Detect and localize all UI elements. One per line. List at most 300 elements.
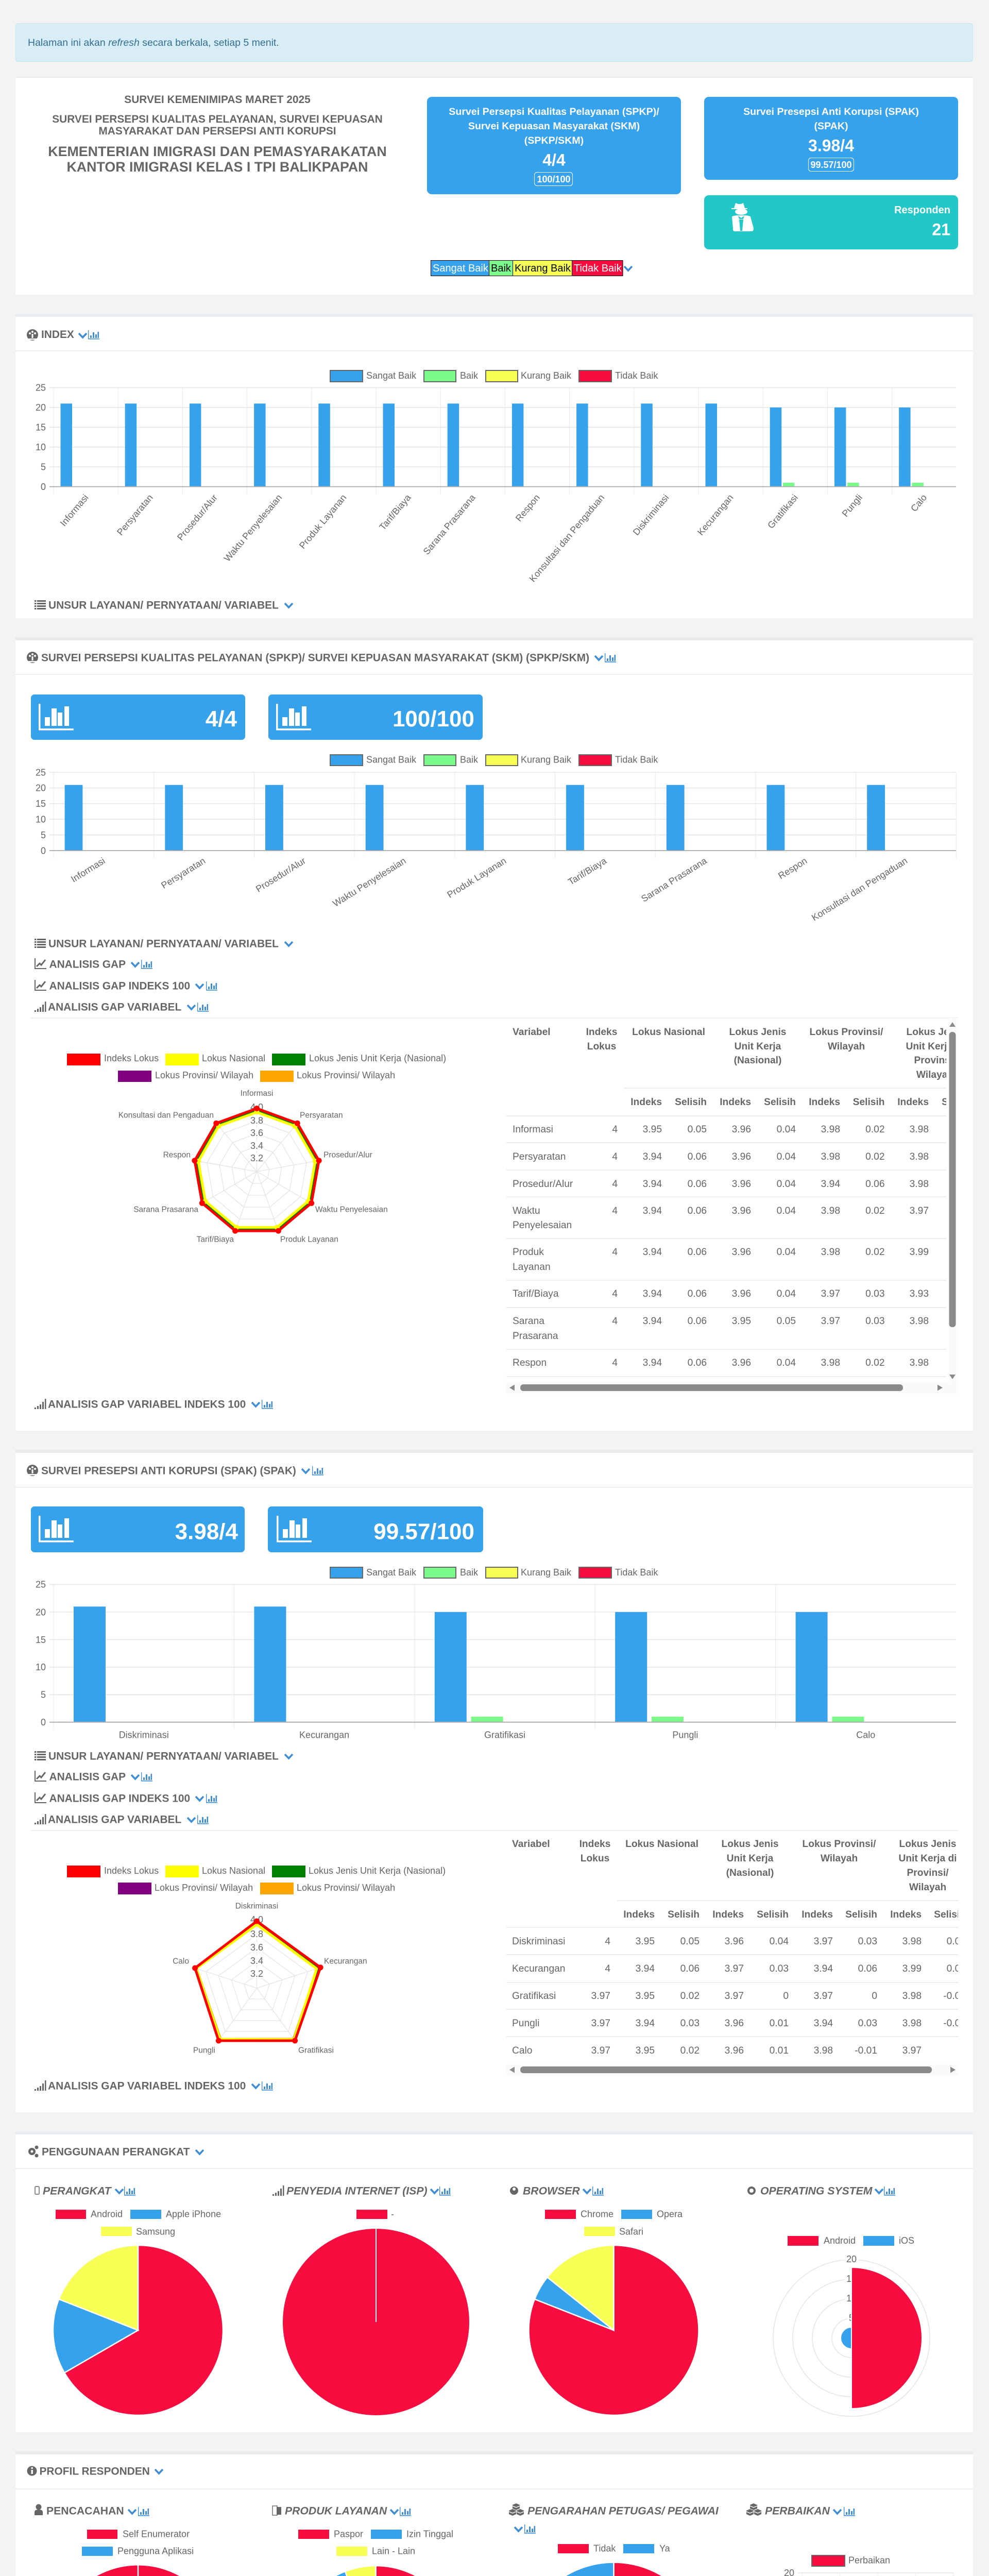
heading: unsur layanan: UNSUR LAYANAN/ PERNYATAAN/ VARIABEL [48, 938, 279, 950]
title: survey heading block: SURVEI PERSEPSI KUALITAS PELAYANAN, SURVEI KEPUASAN [52, 113, 383, 125]
table: SPAK gap analysis: Unit Kerja di [898, 1853, 957, 1864]
legend: SPAK radar: Lokus Jenis Unit Kerja (Nasional) [309, 1866, 446, 1876]
card: score 99.57/100 [268, 1506, 483, 1552]
table: SPAK gap analysis: 0.01 [947, 1963, 966, 1974]
table: SPKP gap analysis: Penyelesaian [513, 1220, 572, 1231]
table: SPKP gap analysis: Wilayah [916, 1070, 953, 1080]
heading: analisis gap: ANALISIS GAP [49, 1771, 126, 1783]
table: SPKP gap analysis: Respon [513, 1358, 547, 1368]
table: SPAK gap analysis: 0.06 [858, 1963, 877, 1974]
legend: produk layanan: Izin Tinggal [406, 2529, 453, 2539]
table: SPAK gap analysis: Unit Kerja [727, 1853, 774, 1864]
polar chart: operating system [773, 2254, 930, 2416]
bar chart: index: Informasi [58, 493, 91, 528]
bar chart: SPKP: 5 [41, 830, 46, 840]
pie chart: browser [528, 2245, 698, 2415]
legend: browser: Chrome [581, 2209, 613, 2219]
bar chart: SPAK: 25 [36, 1580, 46, 1590]
table: SPKP gap analysis: 3.93 [910, 1289, 929, 1299]
panel: respondent profile [15, 2451, 973, 2576]
card: SPAK score: 99.57/100 [810, 160, 852, 170]
table: SPKP gap analysis: 4 [612, 1247, 618, 1258]
chart block: produk layanan [272, 2505, 461, 2576]
table: SPKP gap analysis: 3.94 [643, 1247, 662, 1258]
radar chart: SPKP variables: 3.8 [250, 1115, 263, 1126]
card: SPAK score: (SPAK) [814, 121, 848, 132]
card: score 3.98/4 [31, 1506, 245, 1552]
bar chart: SPKP: Prosedur/Alur [254, 855, 308, 894]
table: SPAK gap analysis: Provinsi/ [907, 1868, 949, 1878]
table: SPKP gap analysis: Indeks [897, 1097, 929, 1108]
table: SPKP gap analysis: Provinsi/ [914, 1055, 956, 1066]
table: SPKP gap analysis: 3.94 [821, 1179, 840, 1190]
table: SPAK gap analysis: 3.97 [902, 2045, 922, 2056]
table: SPAK gap analysis: 0.04 [770, 1936, 789, 1947]
bar chart: SPAK [36, 1580, 956, 1740]
bar chart: SPAK: 15 [36, 1635, 46, 1645]
bar chart: SPAK: Pungli [672, 1730, 698, 1740]
radar chart: SPAK variables: 4.0 [250, 1914, 263, 1925]
heading: unsur layanan: UNSUR LAYANAN/ PERNYATAAN/ VARIABEL [48, 600, 279, 611]
bar chart: SPKP: Respon [776, 855, 809, 881]
radar chart: SPKP variables [118, 1089, 388, 1244]
legend: perangkat: Android [91, 2209, 123, 2219]
legend: rating scale [431, 261, 632, 276]
legend: operating system: iOS [899, 2235, 914, 2246]
heading: browser: BROWSER [523, 2185, 580, 2197]
legend: operating system [788, 2235, 914, 2246]
legend: index chart: Baik [460, 370, 479, 381]
bar chart: SPKP: 0 [41, 846, 46, 856]
bar chart: index: Persyaratan [115, 493, 155, 537]
table: SPAK gap analysis: 3.98 [902, 1936, 922, 1947]
legend: SPAK chart: Kurang Baik [521, 1567, 572, 1578]
table: SPKP gap analysis: Wilayah [828, 1041, 865, 1052]
table: SPAK gap analysis: Gratifikasi [512, 1991, 556, 2002]
chart block: pencacahan [35, 2504, 224, 2576]
legend: pencacahan [82, 2529, 194, 2556]
table: SPKP gap analysis: Selisih [764, 1097, 796, 1108]
table: SPAK gap analysis: 3.94 [636, 1963, 655, 1974]
heading: pencacahan [35, 2504, 149, 2517]
table: SPKP gap analysis: 0.06 [865, 1179, 885, 1190]
legend: perangkat [56, 2209, 221, 2237]
table: SPAK gap analysis: Kecurangan [512, 1963, 565, 1974]
card: SPAK score [704, 97, 958, 180]
table: SPAK gap analysis: (Nasional) [726, 1868, 774, 1878]
bar chart: index: 5 [41, 462, 46, 472]
card: SPKP/SKM score [427, 97, 681, 194]
table: SPAK gap analysis: 3.94 [814, 2018, 833, 2029]
card: score 3.98/4: 3.98/4 [175, 1519, 238, 1545]
table: SPAK gap analysis: 3.95 [636, 1991, 655, 2002]
table: SPAK gap analysis: 3.98 [814, 2045, 833, 2056]
panel: index [15, 314, 973, 618]
heading: SPKP section: SURVEI PERSEPSI KUALITAS PELAYANAN (SPKP)/ SURVEI KEPUASAN MASYARAKAT (SKM) (SPKP/SKM) [41, 652, 589, 664]
table: SPKP gap analysis: 0.06 [688, 1289, 707, 1299]
table: SPKP gap analysis: 0.04 [777, 1151, 796, 1162]
heading: browser [510, 2185, 604, 2197]
table: SPKP gap analysis: 3.98 [821, 1151, 840, 1162]
card: score 99.57/100: 99.57/100 [373, 1519, 474, 1545]
table: SPAK gap analysis: 3.96 [725, 1936, 744, 1947]
table: SPAK gap analysis: 0.06 [680, 1963, 700, 1974]
legend: rating scale: Kurang Baik [515, 263, 571, 274]
alert: refresh notice [15, 24, 973, 62]
bar chart: index: 25 [36, 382, 46, 393]
table: SPKP gap analysis: 4 [612, 1358, 618, 1368]
bar chart: index: 0 [41, 482, 46, 492]
legend: SPAK chart [330, 1567, 658, 1578]
polar chart: operating system: 10 [846, 2293, 857, 2303]
table: SPKP gap analysis: 3.97 [821, 1289, 840, 1299]
table: SPKP gap analysis: Lokus Jenis [907, 1027, 963, 1038]
bar chart: SPAK: Calo [856, 1730, 875, 1740]
heading: ISP: PENYEDIA INTERNET (ISP) [286, 2185, 428, 2197]
table: SPAK gap analysis: 3.98 [902, 1991, 922, 2002]
legend: SPKP chart: Sangat Baik [366, 754, 417, 765]
radar chart: SPAK variables: 3.2 [250, 1969, 263, 1979]
table: SPKP gap analysis: Tarif/Biaya [513, 1289, 559, 1299]
heading: operating system: OPERATING SYSTEM [760, 2185, 873, 2197]
pie chart: perangkat [53, 2245, 223, 2415]
table: SPAK gap analysis: Indeks [802, 1909, 833, 1920]
legend: SPAK radar: Lokus Provinsi/ Wilayah [297, 1883, 395, 1893]
card: SPAK score: 3.98/4 [808, 136, 854, 155]
table: SPKP gap analysis: Produk [513, 1247, 544, 1258]
table: SPAK gap analysis: Calo [512, 2045, 532, 2056]
pie chart: pencacahan [53, 2566, 224, 2576]
table: SPKP gap analysis: 3.98 [821, 1124, 840, 1135]
chart block: browser [510, 2185, 698, 2415]
table: SPAK gap analysis: 3.96 [725, 2045, 744, 2056]
card: respondents count: 21 [932, 221, 950, 239]
legend: pengarahan [558, 2543, 671, 2553]
heading: perbaikan [746, 2503, 855, 2517]
polar chart: operating system: 20 [846, 2254, 857, 2264]
chart block: operating system [748, 2185, 930, 2416]
table: SPAK gap analysis: 3.97 [725, 1963, 744, 1974]
bar chart: index: Respon [514, 493, 542, 523]
card: respondents count [704, 195, 958, 249]
radar chart: SPKP variables: Respon [163, 1151, 191, 1159]
legend: ISP [356, 2209, 394, 2219]
heading: pengarahan petugas [509, 2503, 719, 2534]
table: SPKP gap analysis: 0.04 [777, 1124, 796, 1135]
table: SPAK gap analysis: Selisih [757, 1909, 789, 1920]
table: SPKP gap analysis: Lokus Provinsi/ [810, 1027, 883, 1038]
legend: perangkat: Apple iPhone [166, 2209, 221, 2219]
table: SPKP gap analysis: Layanan [513, 1262, 551, 1273]
bar chart: SPKP: Produk Layanan [446, 855, 508, 900]
heading: analisis gap [35, 958, 152, 971]
table: SPAK gap analysis: 0 [872, 1991, 877, 2002]
table: SPKP gap analysis: 3.94 [643, 1316, 662, 1327]
table: SPAK gap analysis: 0.01 [770, 2045, 789, 2056]
polar chart: operating system: 15 [846, 2274, 857, 2284]
table: SPKP gap analysis: 4 [612, 1316, 618, 1327]
table: SPAK gap analysis: 0.03 [680, 2018, 700, 2029]
table: SPAK gap analysis: Indeks [623, 1909, 655, 1920]
panel: SPAK survey [15, 1450, 973, 2112]
radar chart: SPKP variables: Informasi [241, 1089, 273, 1098]
donut chart: pengarahan [520, 2563, 707, 2576]
heading: analisis gap [35, 1771, 152, 1783]
heading: SPAK section: SURVEI PRESEPSI ANTI KORUPSI (SPAK) (SPAK) [41, 1465, 296, 1477]
legend: SPAK radar: Lokus Provinsi/ Wilayah [155, 1883, 253, 1893]
legend: index chart: Sangat Baik [366, 370, 417, 381]
table: SPKP gap analysis: 4 [612, 1179, 618, 1190]
table: SPKP gap analysis: 3.98 [821, 1247, 840, 1258]
card: SPKP/SKM score: 4/4 [542, 150, 566, 169]
table: SPAK gap analysis: Selisih [934, 1909, 966, 1920]
table: SPKP gap analysis: 0.03 [865, 1316, 885, 1327]
table: SPKP gap analysis: Prasarana [513, 1331, 558, 1342]
table: SPKP gap analysis: 0.04 [777, 1206, 796, 1216]
table: SPKP gap analysis: Prosedur/Alur [513, 1179, 573, 1190]
table: SPKP gap analysis: Indeks [809, 1097, 840, 1108]
table: SPAK gap analysis: 0.03 [770, 1963, 789, 1974]
heading: produk layanan: PRODUK LAYANAN [285, 2505, 387, 2517]
table: SPKP gap analysis [506, 1018, 974, 1394]
legend: SPKP chart: Tidak Baik [615, 754, 658, 765]
table: SPAK gap analysis: 0 [960, 2045, 966, 2056]
table: SPAK gap analysis: 0 [783, 1991, 789, 2002]
table: SPAK gap analysis: Wilayah [821, 1853, 858, 1864]
legend: radar chart: Lokus Provinsi/ Wilayah [297, 1070, 395, 1080]
table: SPKP gap analysis: Lokus Nasional [632, 1027, 705, 1038]
legend: radar chart: Lokus Provinsi/ Wilayah [155, 1070, 253, 1080]
table: SPKP gap analysis: 3.94 [643, 1151, 662, 1162]
heading: index [27, 329, 99, 341]
heading: index: INDEX [41, 329, 74, 341]
table: SPKP gap analysis: 0.05 [777, 1316, 796, 1327]
panel: SPKP/SKM survey [15, 637, 974, 1431]
table: SPKP gap analysis: Variabel [513, 1027, 551, 1038]
card: score 4/4: 4/4 [206, 706, 237, 732]
table: SPAK gap analysis: 0.03 [858, 2018, 877, 2029]
table: SPKP gap analysis: 3.96 [732, 1124, 751, 1135]
table: SPAK gap analysis: -0.01 [943, 1991, 966, 2002]
card: SPKP/SKM score: Survei Persepsi Kualitas Pelayanan (SPKP)/ [449, 106, 659, 117]
table: SPAK gap analysis: 0.05 [680, 1936, 700, 1947]
heading: pencacahan: PENCACAHAN [46, 2505, 124, 2517]
legend: pengarahan: Ya [659, 2543, 671, 2553]
radar chart: SPAK variables: Calo [173, 1957, 189, 1966]
radar chart: SPKP variables: Konsultasi dan Pengaduan [118, 1111, 214, 1120]
bar chart: index: Calo [909, 493, 929, 514]
table: SPKP gap analysis: 3.94 [643, 1358, 662, 1368]
bar chart: index: Konsultasi dan Pengaduan [527, 493, 606, 584]
card: score 100/100: 100/100 [393, 706, 474, 732]
table: SPAK gap analysis: Selisih [668, 1909, 700, 1920]
alert: refresh notice: Halaman ini akan refresh secara berkala, setiap 5 menit. [28, 37, 279, 48]
table: SPAK gap analysis: 3.97 [814, 1936, 833, 1947]
table: SPAK gap analysis: Lokus [581, 1853, 609, 1864]
heading: unsur layanan: UNSUR LAYANAN/ PERNYATAAN/ VARIABEL [48, 1751, 279, 1762]
legend: perbaikan: Perbaikan [848, 2555, 890, 2566]
table: SPKP gap analysis: 3.98 [821, 1358, 840, 1368]
table: SPKP gap analysis: 3.96 [732, 1179, 751, 1190]
bar chart: SPKP: 15 [36, 799, 46, 809]
card: score 4/4 [31, 694, 245, 740]
table: SPKP gap analysis: 0.06 [688, 1206, 707, 1216]
table: SPAK gap analysis: 3.98 [902, 2018, 922, 2029]
panel: device usage [15, 2131, 973, 2432]
title: survey heading block: SURVEI KEMENIMIPAS MARET 2025 [124, 94, 311, 106]
bar chart: SPKP: Waktu Penyelesaian [331, 855, 408, 909]
heading: perangkat: PERANGKAT [43, 2185, 112, 2197]
table: SPAK gap analysis: 0.02 [680, 1991, 700, 2002]
table: SPKP gap analysis: 3.96 [732, 1358, 751, 1368]
title: survey heading block: KEMENTERIAN IMIGRASI DAN PEMASYARAKATAN [48, 144, 387, 159]
legend: SPAK chart: Tidak Baik [615, 1567, 658, 1578]
table: SPKP gap analysis: 3.96 [732, 1289, 751, 1299]
table: SPKP gap analysis: Unit Kerja [735, 1041, 781, 1052]
heading: analisis gap indeks 100: ANALISIS GAP INDEKS 100 [49, 980, 190, 992]
table: SPKP gap analysis: 4 [612, 1206, 618, 1216]
radar chart: SPAK variables: Pungli [193, 2046, 215, 2055]
legend: pengarahan: Tidak [593, 2543, 616, 2553]
heading: penggunaan perangkat: PENGGUNAAN PERANGKAT [42, 2146, 190, 2158]
legend: produk layanan: Lain - Lain [372, 2546, 415, 2556]
table: SPKP gap analysis: 0.04 [777, 1358, 796, 1368]
bar chart: SPAK: 0 [41, 1717, 46, 1727]
legend: index chart: Kurang Baik [521, 370, 572, 381]
bar chart: SPAK: 10 [36, 1662, 46, 1672]
legend: browser: Opera [657, 2209, 683, 2219]
bar chart: index: Pungli [840, 493, 864, 519]
table: SPKP gap analysis: 3.96 [732, 1206, 751, 1216]
bar chart: index: Diskriminasi [631, 493, 671, 537]
legend: radar chart: Indeks Lokus [104, 1053, 159, 1063]
table: SPKP gap analysis: Waktu [513, 1206, 540, 1216]
bar chart: SPAK: Kecurangan [299, 1730, 349, 1740]
table: SPKP gap analysis: 0.06 [688, 1316, 707, 1327]
table: SPKP gap analysis: 3.94 [643, 1206, 662, 1216]
table: SPKP gap analysis: Indeks [720, 1097, 751, 1108]
heading: profil responden: PROFIL RESPONDEN [39, 2466, 150, 2477]
table: SPKP gap analysis: 3.97 [910, 1206, 929, 1216]
table: SPAK gap analysis: Lokus Jenis [899, 1839, 956, 1850]
title: survey heading block [48, 94, 387, 175]
table: SPKP gap analysis: Indeks [630, 1097, 662, 1108]
radar chart: SPKP variables: Sarana Prasarana [133, 1206, 198, 1214]
table: SPAK gap analysis: Indeks [712, 1909, 744, 1920]
legend: radar chart: Lokus Nasional [202, 1053, 265, 1063]
bar chart: index [36, 382, 956, 584]
table: SPKP gap analysis: 3.95 [732, 1316, 751, 1327]
bar chart: SPKP: Tarif/Biaya [566, 855, 609, 887]
radar chart: SPKP variables: Produk Layanan [280, 1235, 338, 1244]
legend: produk layanan: Paspor [334, 2529, 363, 2539]
legend: index chart: Tidak Baik [615, 370, 658, 381]
table: SPAK gap analysis: 3.95 [636, 1936, 655, 1947]
bar chart: SPKP: 25 [36, 768, 46, 778]
table: SPKP gap analysis: 3.99 [910, 1247, 929, 1258]
table: SPAK gap analysis: 3.99 [902, 1963, 922, 1974]
chart block: perbaikan [741, 2503, 957, 2576]
table: SPKP gap analysis: Sarana [513, 1316, 544, 1327]
legend: radar chart [67, 1053, 446, 1082]
table: SPKP gap analysis: 0.04 [777, 1247, 796, 1258]
table: SPKP gap analysis: 3.95 [643, 1124, 662, 1135]
table: SPKP gap analysis: 3.98 [910, 1151, 929, 1162]
heading: pengarahan petugas: PENGARAHAN PETUGAS/ PEGAWAI [527, 2505, 719, 2517]
table: SPAK gap analysis: 3.96 [725, 2018, 744, 2029]
card: SPKP/SKM score: 100/100 [537, 174, 571, 184]
table: SPKP gap analysis: 0.02 [865, 1247, 885, 1258]
table: SPKP gap analysis: 0.02 [865, 1358, 885, 1368]
table: SPAK gap analysis: 3.97 [591, 1991, 610, 2002]
card: SPAK score: Survei Presepsi Anti Korupsi (SPAK) [743, 106, 919, 117]
heading: analisis gap: ANALISIS GAP [49, 958, 126, 971]
radar chart: SPKP variables: 4.0 [250, 1102, 263, 1112]
panel: survey summary [15, 77, 973, 295]
legend: SPKP chart: Kurang Baik [521, 754, 572, 765]
table: SPKP gap analysis: (Nasional) [734, 1055, 781, 1066]
legend: pencacahan: Pengguna Aplikasi [117, 2546, 194, 2556]
table: SPKP gap analysis: Selisih [675, 1097, 707, 1108]
radar chart: SPKP variables: Waktu Penyelesaian [315, 1206, 388, 1214]
radar chart: SPKP variables: 3.4 [250, 1141, 263, 1151]
table: SPKP gap analysis: Unit Kerja di [906, 1041, 964, 1052]
table: SPAK gap analysis: 4 [605, 1936, 610, 1947]
legend: perangkat: Samsung [136, 2227, 175, 2237]
legend: SPAK radar [67, 1866, 446, 1894]
legend: rating scale: Baik [491, 263, 511, 274]
heading: perangkat [35, 2185, 135, 2197]
radar chart: SPKP variables: Tarif/Biaya [197, 1235, 234, 1244]
legend: operating system: Android [824, 2235, 856, 2246]
table: SPAK gap analysis: 3.94 [636, 2018, 655, 2029]
card: SPKP/SKM score: (SPKP/SKM) [524, 135, 584, 146]
table: SPAK gap analysis [506, 1839, 966, 2076]
heading: analisis gap variabel indeks 100: ANALISIS GAP VARIABEL INDEKS 100 [48, 2080, 246, 2092]
table: SPAK gap analysis: 3.94 [814, 1963, 833, 1974]
table: SPKP gap analysis: 0.04 [777, 1179, 796, 1190]
bar chart: SPKP: Konsultasi dan Pengaduan [810, 855, 909, 923]
bar chart: SPKP: Persyaratan [159, 855, 207, 891]
bar chart: index: Gratifikasi [765, 493, 800, 531]
table: SPKP gap analysis: 0.02 [865, 1124, 885, 1135]
table: SPKP gap analysis: Informasi [513, 1124, 553, 1135]
legend: produk layanan [298, 2529, 453, 2556]
bar chart: SPAK: 5 [41, 1690, 46, 1700]
bar chart: index: Prosedur/Alur [175, 493, 219, 543]
title: survey heading block: KANTOR IMIGRASI KELAS I TPI BALIKPAPAN [66, 159, 368, 175]
table: SPKP gap analysis: 4 [612, 1289, 618, 1299]
legend: browser: Safari [619, 2227, 643, 2237]
radar chart: SPAK variables: Diskriminasi [235, 1902, 278, 1910]
table: SPKP gap analysis: 3.96 [732, 1247, 751, 1258]
legend: ISP: - [391, 2209, 394, 2219]
chart block: perangkat [35, 2185, 223, 2415]
table: SPAK gap analysis: 3.97 [591, 2045, 610, 2056]
table: SPKP gap analysis: Indeks [586, 1027, 617, 1038]
table: SPKP gap analysis: 4 [612, 1151, 618, 1162]
table: SPKP gap analysis: 0.02 [865, 1206, 885, 1216]
radar chart: SPKP variables: 3.6 [250, 1128, 263, 1138]
table: SPKP gap analysis: 3.98 [910, 1179, 929, 1190]
table: SPAK gap analysis: Lokus Provinsi/ [803, 1839, 876, 1850]
table: SPKP gap analysis: Persyaratan [513, 1151, 566, 1162]
table: SPKP gap analysis: 3.97 [821, 1316, 840, 1327]
table: SPAK gap analysis: 0.02 [947, 1936, 966, 1947]
table: SPAK gap analysis: 0.03 [858, 1936, 877, 1947]
bar chart: index: Produk Layanan [297, 493, 348, 551]
table: SPAK gap analysis: Diskriminasi [512, 1936, 565, 1947]
